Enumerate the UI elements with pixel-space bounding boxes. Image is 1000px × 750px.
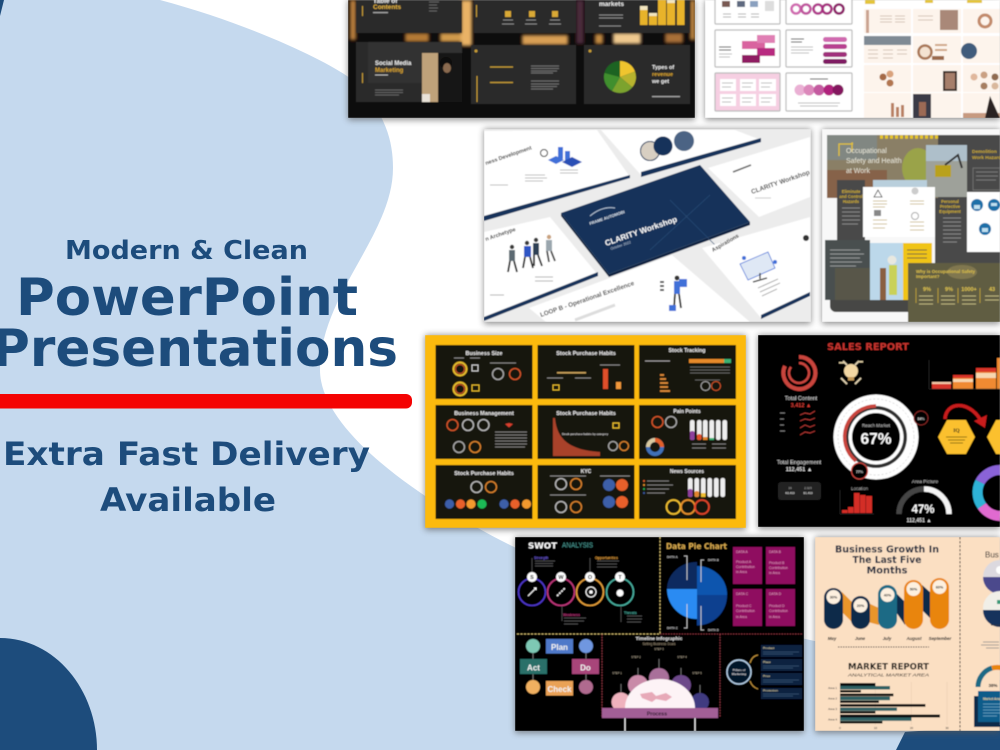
slide: KYC xyxy=(550,469,630,512)
slide: pink list xyxy=(791,37,847,64)
pdca cycle diagram: Plan xyxy=(551,643,568,652)
slide: business size xyxy=(454,351,520,396)
slide: KYC: KYC xyxy=(581,469,592,475)
slide: business development xyxy=(484,130,630,221)
timeline infographic: Timeline Infographic xyxy=(636,636,683,642)
slide: navy clarity cover: CLARITY Workshop xyxy=(604,215,678,248)
market bar chart: Area 3 xyxy=(828,707,837,711)
pillars of marketing diagram: Promotion xyxy=(763,688,778,692)
red ring chart xyxy=(783,357,815,389)
slide: markets bar chart xyxy=(585,0,690,33)
swot ring: opportunities: O xyxy=(588,575,593,581)
pill chart: 40% xyxy=(884,594,892,598)
magenta data boxes: Product B xyxy=(769,561,785,565)
slide: occupational safety title: Occupational xyxy=(846,148,887,155)
location bar chart xyxy=(840,486,874,514)
pdca cycle diagram: Check xyxy=(547,685,572,694)
slide: occupational safety title xyxy=(827,135,938,198)
subheading: Extra Fast Delivery: Extra Fast Delivery xyxy=(3,435,370,473)
slide: clarity workshop right: CLARITY Workshop xyxy=(750,169,811,196)
slide: eliminate and control hazards: Hazards xyxy=(843,199,860,204)
slide: aspirations: Aspirations xyxy=(711,233,740,254)
slide: navy clarity cover: FRAME AUTOMOBI xyxy=(589,209,625,226)
slide: stock purchase area chart xyxy=(553,411,628,456)
title: swot analysis: SWOT xyxy=(528,542,558,550)
sparkline list xyxy=(780,411,815,435)
magenta data boxes: in Area xyxy=(769,615,780,619)
slide: markets bar chart: markets xyxy=(599,1,624,8)
panel: white and pink template slides xyxy=(705,0,1000,118)
swot ring: threats xyxy=(606,572,642,622)
swot ring: weaknesses: Weakness xyxy=(563,613,580,617)
slide: navy clarity cover xyxy=(561,165,750,277)
slide: eliminate and control hazards: Eliminate xyxy=(842,189,861,194)
slide: photo columns xyxy=(722,1,774,17)
slide: stock purchase area chart: Stock Purchase Habits xyxy=(556,411,616,417)
slide: stock purchase area chart: Stock purchase habits by category xyxy=(562,432,609,436)
location bar chart: Location xyxy=(851,486,869,491)
subheading: Available: Available xyxy=(100,481,276,519)
slide: demolition hazards: Demolition xyxy=(972,149,997,155)
swot ring: threats: Threats xyxy=(624,611,637,615)
total content stat xyxy=(785,396,818,409)
magenta data boxes: Contribution xyxy=(736,565,755,569)
background: dark sliver top-left xyxy=(0,0,4,16)
slide: pink grid xyxy=(720,79,776,106)
red divider bar xyxy=(0,394,412,408)
slide: stock tracking: Stock Tracking xyxy=(669,348,705,354)
total content stat: Total Content xyxy=(785,396,818,402)
month labels: May xyxy=(828,636,837,641)
pie chart: DATA B xyxy=(708,558,720,562)
slide: news sources: News Sources xyxy=(670,469,704,475)
slide: business management: Business Management xyxy=(454,411,514,417)
magenta data boxes: Contribution xyxy=(769,566,788,570)
month labels: September xyxy=(929,636,952,641)
swot ring: weaknesses: W xyxy=(558,575,564,581)
slide: business size: Business Size xyxy=(466,351,502,357)
magenta data boxes: Product D xyxy=(769,604,785,608)
swot ring: strengths: Strength xyxy=(534,556,548,560)
slide: stock purchase habits bars: Stock Purchase Habits xyxy=(556,351,616,357)
small stats box xyxy=(778,482,821,500)
total content stat: 3,412 ▲ xyxy=(791,403,811,409)
right column: circle stat bottom xyxy=(983,591,1000,627)
slide: team archetype xyxy=(484,217,598,321)
slide: revenue pie chart: we get xyxy=(651,79,669,85)
title: market report xyxy=(847,662,930,678)
pdca cycle diagram: Do xyxy=(580,664,591,672)
market bar chart: 20 xyxy=(910,726,913,730)
small stats box: $1,413 xyxy=(803,491,813,495)
magenta data boxes: DATA D xyxy=(769,592,782,596)
title: sales report: SALES REPORT xyxy=(827,342,909,353)
total engagement stat: 112,451 ▲ xyxy=(786,467,812,473)
pill chart: 60% xyxy=(936,586,944,590)
swot ring: weaknesses xyxy=(548,572,586,624)
slide: two text columns xyxy=(471,45,576,104)
slide: navy clarity cover: October 2022 xyxy=(610,240,631,251)
magenta data boxes: Product C xyxy=(736,604,752,608)
market bar chart: 10 xyxy=(874,726,877,730)
slide: occupational safety title: Safety and Health xyxy=(846,158,902,165)
slide: social media marketing: Marketing xyxy=(375,68,404,74)
market bar chart: Area 1 xyxy=(828,686,837,690)
area picture half gauge: 112,451 ▲ xyxy=(906,518,932,524)
timeline infographic: Setting Business Goals xyxy=(643,642,676,646)
small badge: 77%: 77% xyxy=(856,470,864,474)
title: market report: ANALYTICAL MARKET AREA xyxy=(847,672,929,678)
slide: photo circles xyxy=(601,130,761,177)
pie chart: DATA C xyxy=(667,626,679,630)
month labels: June xyxy=(855,636,866,641)
slide: protective equipment: Personal xyxy=(941,199,959,204)
slide: aspirations xyxy=(702,217,810,319)
timeline infographic: STEP 2 xyxy=(631,655,641,659)
slide: pain points xyxy=(648,409,727,454)
heading: Modern & Clean: Modern & Clean xyxy=(65,236,308,266)
card shadows xyxy=(348,0,1000,733)
pie chart: DATA D xyxy=(708,628,720,632)
slide: why occupational safety is important: 43 xyxy=(989,287,995,293)
magenta data boxes: Product A xyxy=(736,560,752,564)
total engagement stat: Total Engagement xyxy=(777,460,822,466)
slide: speech bubbles xyxy=(719,35,775,63)
small stats box: 19 xyxy=(788,486,792,490)
title: data pie chart: Data Pie Chart xyxy=(666,542,727,551)
title: business growth: Months xyxy=(866,566,908,576)
pill chart: 30% xyxy=(830,596,838,600)
slide: clarity workshop right xyxy=(708,137,811,217)
title: swot analysis xyxy=(528,542,593,550)
market bar chart: 0 xyxy=(839,726,841,730)
swot ring: threats: T xyxy=(618,575,622,581)
pillars of marketing diagram: Place xyxy=(763,660,771,664)
warm background lights xyxy=(350,0,695,46)
swot ring: opportunities: Opportunities xyxy=(595,556,618,560)
small badge: 77% xyxy=(852,463,868,479)
magenta data boxes: Contribution xyxy=(736,609,755,613)
slide: loop b operational excellence xyxy=(529,255,750,322)
panel: yellow stock report slides xyxy=(425,335,746,528)
pill chart: 50% xyxy=(910,588,918,592)
pill chart: 20% xyxy=(857,604,865,608)
timeline infographic: STEP 3 xyxy=(654,647,664,651)
magenta data boxes: in Area xyxy=(769,571,780,575)
donut chart right xyxy=(978,470,1000,516)
slide: eliminate and control hazards xyxy=(837,180,935,240)
slide: social icons xyxy=(474,0,576,33)
slide: social media marketing xyxy=(356,42,462,102)
slide: news sources xyxy=(643,469,725,514)
slide: stock purchase dots: Stock Purchase Habits xyxy=(454,471,514,477)
pie chart xyxy=(667,555,727,632)
area picture half gauge: 47% xyxy=(911,504,935,516)
right column: gauge and market analysis box xyxy=(974,667,1000,727)
right column: title fragment: Bus xyxy=(985,550,999,560)
slide: eliminate and control hazards: and Control xyxy=(839,194,863,199)
area picture half gauge: Area Picture xyxy=(912,479,939,485)
slide: revenue pie chart: Types of xyxy=(652,65,674,71)
title: business growth: Business Growth In xyxy=(835,544,939,556)
panel: dark social media slides xyxy=(348,0,695,118)
reach market ring xyxy=(834,394,918,480)
small stats box: 63,413 xyxy=(785,491,795,495)
small badge: 84%: 84% xyxy=(917,417,925,421)
timeline infographic: Process xyxy=(647,712,667,718)
magenta data boxes xyxy=(733,547,795,626)
timeline infographic: STEP 5 xyxy=(692,671,702,675)
icon: lightbulb team xyxy=(839,361,863,384)
slide: team archetype: n Archetype xyxy=(485,227,517,243)
background: dark blue bottom-right shape xyxy=(896,725,1000,750)
slide: protective equipment xyxy=(939,192,1000,252)
right column: gauge and market analysis box: 38% xyxy=(988,683,998,688)
hexagon: IQ xyxy=(938,420,975,454)
pillars of marketing diagram xyxy=(727,645,802,699)
slide: why occupational safety is important: 9% xyxy=(923,287,931,293)
total engagement stat xyxy=(777,460,822,473)
title: market report: MARKET REPORT xyxy=(848,662,930,672)
magenta data boxes: in Area xyxy=(736,615,747,619)
panel: occupational safety slides xyxy=(822,129,1000,322)
magenta data boxes: in Area xyxy=(736,570,747,574)
pie chart: DATA A xyxy=(667,555,678,559)
title: business growth: The Last Five xyxy=(852,555,922,566)
slide: table of contents: Contents xyxy=(373,4,402,11)
market bar chart: Area 4 xyxy=(828,718,837,722)
magenta data boxes: Contribution xyxy=(769,609,788,613)
magenta data boxes: DATA C xyxy=(736,592,749,596)
slide: business development: ness Development xyxy=(485,145,533,167)
month labels: July xyxy=(883,636,892,641)
slide: occupational safety title: at Work xyxy=(846,168,870,175)
small badge: 84% xyxy=(914,411,928,425)
slide: why occupational safety is important xyxy=(908,263,1000,322)
right column: gauge and market analysis box: Market Ana xyxy=(983,697,1000,701)
slide: stock tracking xyxy=(645,348,731,391)
heading: Presentations: Presentations xyxy=(0,319,398,379)
title: swot analysis: ANALYSIS xyxy=(562,542,593,550)
slide: loop b operational excellence: LOOP B - Operational Excellence xyxy=(539,280,636,319)
timeline infographic xyxy=(602,636,718,731)
slide: why occupational safety is important: 9% xyxy=(945,287,953,293)
beige slide tiles xyxy=(864,0,1000,118)
slide: stock purchase habits bars xyxy=(547,351,621,390)
pillars of marketing diagram: Price xyxy=(763,674,771,678)
month labels: August xyxy=(905,636,922,641)
pdca cycle diagram xyxy=(520,639,599,696)
panel: sales report dashboard xyxy=(758,335,1000,527)
slide: worker photo xyxy=(825,240,932,300)
slide: table of contents xyxy=(356,0,462,33)
pdca cycle diagram: Act xyxy=(527,664,540,672)
pillars of marketing diagram: Marketing xyxy=(732,672,746,676)
right column: circle stat top xyxy=(983,560,1000,594)
slide: social media marketing: Social Media xyxy=(375,61,412,67)
slide: demolition hazards xyxy=(926,145,1000,197)
hexagon: right xyxy=(987,420,1000,454)
slide: stock purchase dots xyxy=(445,471,531,509)
magenta data boxes: DATA A xyxy=(736,550,748,554)
hexagon: IQ: IQ xyxy=(953,428,960,434)
slide: revenue pie chart: revenue xyxy=(652,72,673,78)
reach market ring: Reach Market xyxy=(862,423,891,428)
heading: PowerPoint: PowerPoint xyxy=(16,268,358,328)
timeline infographic: STEP 1 xyxy=(612,671,622,675)
small stats box: 2,023 xyxy=(804,486,812,490)
slide: revenue pie chart xyxy=(584,45,690,104)
magenta data boxes: DATA B xyxy=(769,550,782,554)
swot ring: opportunities xyxy=(576,556,619,606)
panel: clarity workshop isometric slides xyxy=(484,129,811,322)
slide: pain points: Pain Points xyxy=(673,409,701,415)
panel: swot and marketing infographics xyxy=(515,537,804,731)
title: business growth xyxy=(835,544,939,576)
market bar chart xyxy=(828,682,949,730)
stacked bar chart xyxy=(929,358,1000,389)
reach market ring: 67% xyxy=(860,431,892,448)
slide: protective equipment: Protective xyxy=(940,204,961,209)
swot ring: strengths xyxy=(518,556,555,606)
pillars of marketing diagram: Product xyxy=(763,646,774,650)
background: dark blue corner circle xyxy=(0,638,97,750)
slide: why occupational safety is important: Why is Occupational Safety xyxy=(916,269,976,274)
pillars of marketing diagram: Pillars of xyxy=(733,668,745,672)
arrow: curved red xyxy=(945,405,987,428)
area picture half gauge xyxy=(899,479,949,524)
slide: pink circle chain xyxy=(792,4,844,14)
slide: protective equipment: Equipment xyxy=(939,209,961,214)
market bar chart: 30 xyxy=(945,726,949,730)
market bar chart: Area 2 xyxy=(828,696,837,700)
pill chart xyxy=(824,578,949,629)
timeline infographic: STEP 4 xyxy=(677,655,687,659)
swot ring: strengths: S xyxy=(530,575,534,581)
slide: business management xyxy=(447,411,527,452)
slide: business model circles xyxy=(794,79,844,106)
slide: why occupational safety is important: Important? xyxy=(916,274,940,279)
month labels xyxy=(828,636,952,641)
slide: why occupational safety is important: 1000+ xyxy=(961,287,977,293)
panel: business growth and market report xyxy=(815,537,1000,731)
